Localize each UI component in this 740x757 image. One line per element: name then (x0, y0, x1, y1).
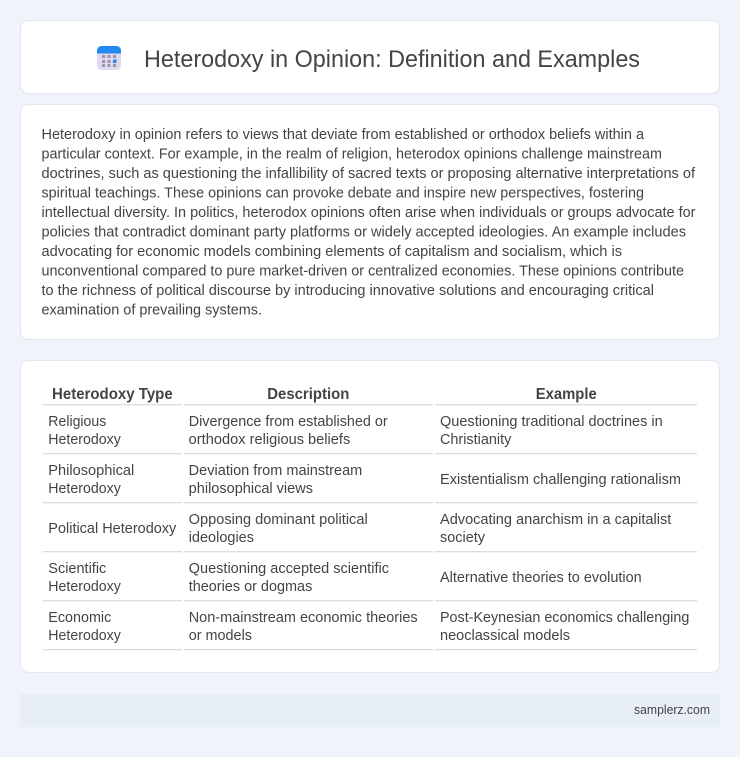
footer credit: samplerz.com (634, 703, 710, 717)
table row: scientific: Questioning accepted scientific (189, 561, 389, 577)
text block: paragraph: policies that contradict dominant party platforms or widely accepted ideologies. An example includes (42, 224, 686, 240)
text block: paragraph: spiritual teachings. These opinions can provoke debate and inspire new perspectives, fostering (42, 185, 644, 201)
table row: scientific: Alternative theories to evolution (440, 570, 642, 586)
table row: philosophical (43, 463, 697, 503)
table row: religious: Religious (48, 414, 106, 430)
footer bar (20, 694, 720, 727)
table row: philosophical: Heterodoxy (48, 481, 122, 497)
text block: paragraph: to the richness of political discourse by introducing innovative solutions and encouraging critical (42, 283, 654, 299)
panel: intro paragraph (20, 104, 720, 340)
table row: political: ideologies (189, 530, 254, 546)
table row: scientific: Scientific (48, 561, 106, 577)
table header row: Example (536, 386, 597, 403)
table row: scientific: theories or dogmas (189, 579, 312, 595)
text block: paragraph: unconventional compared to pure market-driven or centralized economies. These opinions contribute (42, 263, 684, 279)
table row: political (43, 512, 697, 552)
table row: philosophical: Existentialism challenging rationalism (440, 472, 681, 488)
panel: header (20, 20, 720, 94)
table row: religious: Christianity (440, 432, 512, 448)
table row: religious (43, 414, 697, 454)
table header row (43, 386, 697, 405)
text block: paragraph: intellectual diversity. In politics, heterodox opinions often arise when individuals or groups advocate for (42, 205, 696, 221)
icon: calendar (97, 46, 121, 70)
table row: religious: orthodox religious beliefs (189, 432, 350, 448)
table row: economic: Post-Keynesian economics challenging (440, 610, 689, 626)
text block: paragraph: Heterodoxy in opinion refers to views that deviate from established or orthodox beliefs within a (42, 127, 645, 143)
table row: religious: Questioning traditional doctrines in (440, 414, 663, 430)
table row: scientific: Heterodoxy (48, 579, 122, 595)
text block: paragraph: particular context. For example, in the realm of religion, heterodox opinions challenge mainstream (42, 146, 662, 162)
table row: philosophical: Deviation from mainstream (189, 463, 362, 479)
table row: economic: Heterodoxy (48, 628, 122, 644)
table row: philosophical: Philosophical (48, 463, 134, 479)
panel: heterodoxy table (20, 360, 720, 672)
text block: paragraph (42, 127, 696, 318)
table row: political: Advocating anarchism in a capitalist (440, 512, 671, 528)
text block: paragraph: advocating for economic models combining elements of capitalism and socialism, which is (42, 244, 622, 260)
table row: economic: Non-mainstream economic theories (189, 610, 418, 626)
table row: political: society (440, 530, 486, 546)
table row: economic: neoclassical models (440, 628, 570, 644)
table header row: Description (267, 386, 349, 403)
title: Heterodoxy in Opinion: Definition and Examples (144, 46, 640, 73)
table row: philosophical: philosophical views (189, 481, 313, 497)
table row: political: Political Heterodoxy (48, 521, 177, 537)
table row: economic: Economic (48, 610, 111, 626)
table row: religious: Divergence from established or (189, 414, 388, 430)
table row: political: Opposing dominant political (189, 512, 368, 528)
table row: religious: Heterodoxy (48, 432, 122, 448)
table row: economic (43, 610, 697, 650)
table row: scientific (43, 561, 697, 601)
table row: economic: or models (189, 628, 252, 644)
table header row: Heterodoxy Type (52, 386, 173, 403)
text block: paragraph: examination of prevailing systems. (42, 302, 262, 318)
text block: paragraph: doctrines, such as questioning the infallibility of sacred texts or proposing alternative interpretations of (42, 166, 696, 182)
